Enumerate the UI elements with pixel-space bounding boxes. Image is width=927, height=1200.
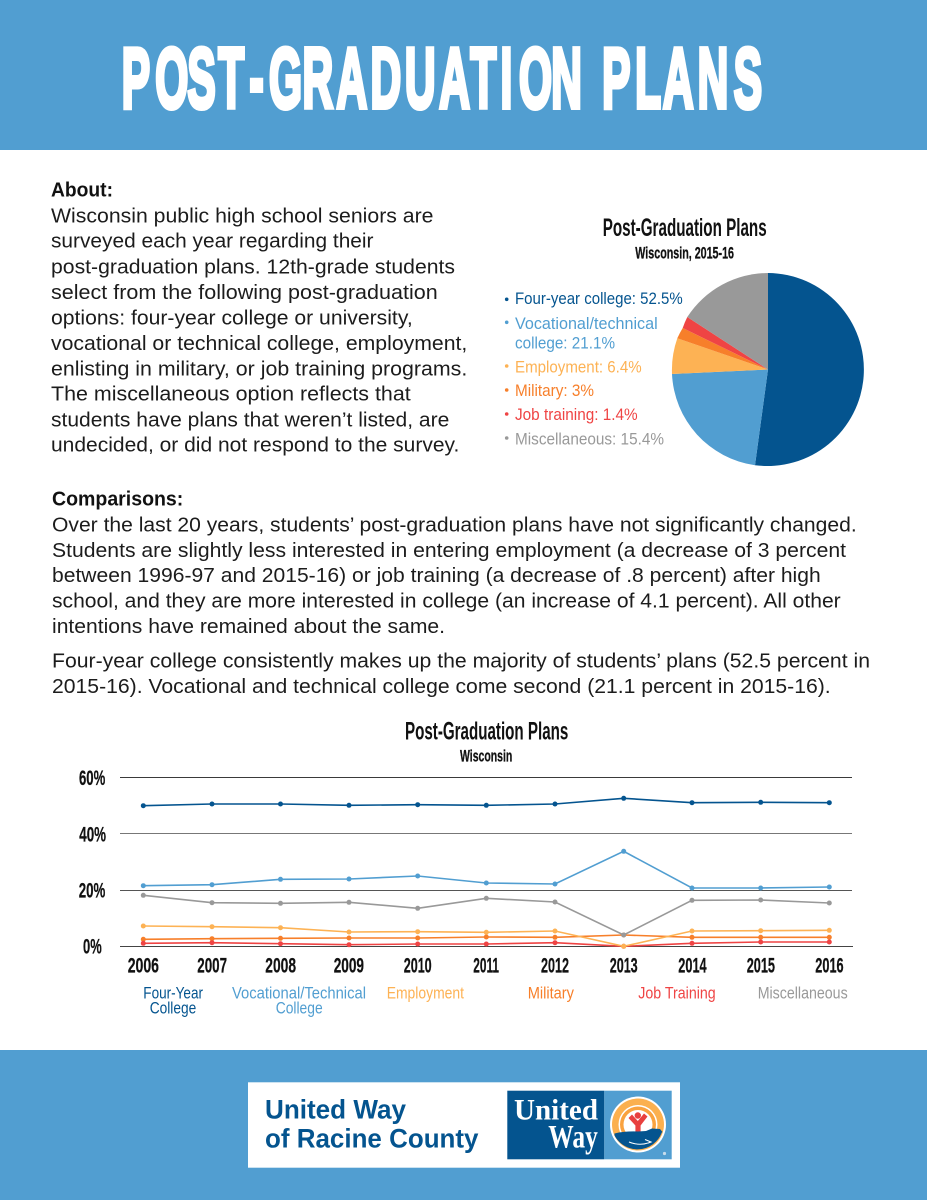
x axis labels: 2014 [678, 953, 707, 977]
line chart subtitle: Wisconsin [460, 747, 512, 766]
comparisons paragraph one: Students are slightly less interested in entering employment (a decrease of 3 percent [52, 540, 846, 562]
pie legend: college: 21.1% [515, 334, 615, 352]
x axis labels: 2007 [197, 953, 227, 977]
pie chart title: Post-Graduation Plans [603, 214, 767, 242]
about paragraph: undecided, or did not respond to the survey. [51, 435, 459, 457]
text block: comparisons [52, 488, 870, 698]
pie legend: Miscellaneous: 15.4% [515, 430, 664, 448]
about paragraph: surveyed each year regarding their [51, 231, 374, 253]
pie legend: Military: 3% [515, 382, 594, 400]
about paragraph: enlisting in military, or job training programs. [51, 358, 467, 380]
x axis labels: 2009 [334, 953, 364, 977]
pie legend: Vocational/technical [515, 315, 658, 333]
series: four-year college [141, 796, 832, 808]
line chart legend: Four-Year [143, 985, 203, 1003]
line chart legend: Job Training [638, 985, 716, 1003]
pie legend [505, 290, 683, 448]
series: vocational/technical college [141, 849, 832, 890]
icon: person [628, 1112, 648, 1134]
x axis labels: 2011 [473, 953, 499, 977]
y axis labels: 20% [79, 879, 105, 903]
United Way wordmark: Way [548, 1119, 598, 1155]
about paragraph: vocational or technical college, employment, [51, 333, 467, 355]
line chart legend: Miscellaneous [758, 985, 848, 1003]
x axis labels: 2010 [404, 953, 432, 977]
comparisons paragraph one [52, 515, 857, 638]
x axis labels: 2012 [541, 953, 569, 977]
about paragraph: post-graduation plans. 12th-grade students [51, 256, 455, 278]
about paragraph: students have plans that weren’t listed, are [51, 409, 449, 431]
United Way wordmark [507, 1091, 604, 1159]
line chart title: Post-Graduation Plans [405, 717, 568, 745]
about paragraph: options: four-year college or university, [51, 307, 413, 329]
comparisons paragraph one: between 1996-97 and 2015-16) or job training (a decrease of .8 percent) after high [52, 565, 821, 587]
series: job training [141, 940, 832, 949]
panel: line chart [79, 717, 853, 1018]
organization name [265, 1094, 478, 1153]
heading: comparisons: Comparisons: [52, 488, 183, 510]
y axis labels [79, 766, 106, 959]
panel: pie chart with legend [505, 214, 864, 466]
organization name: United Way [265, 1094, 406, 1124]
x axis labels: 2006 [128, 953, 159, 977]
icon: United Way helping hand [604, 1091, 672, 1159]
series: miscellaneous [141, 893, 832, 938]
comparisons paragraph one: Over the last 20 years, students’ post-graduation plans have not significantly changed. [52, 515, 857, 537]
comparisons paragraph one: intentions have remained about the same. [52, 616, 445, 638]
x axis labels: 2013 [610, 953, 638, 977]
comparisons paragraph two: 2015-16). Vocational and technical college come second (21.1 percent in 2015-16). [52, 676, 831, 698]
about paragraph: Wisconsin public high school seniors are [51, 205, 434, 227]
about paragraph [51, 205, 467, 457]
organization name: of Racine County [265, 1123, 478, 1153]
series: employment [141, 924, 832, 949]
line chart legend: College [276, 1000, 323, 1018]
line chart legend: Military [528, 985, 575, 1003]
comparisons paragraph two: Four-year college consistently makes up the majority of students’ plans (52.5 percent in [52, 651, 870, 673]
line chart legend: Employment [387, 985, 464, 1003]
y axis labels: 60% [79, 766, 105, 790]
pie legend: Four-year college: 52.5% [515, 290, 683, 308]
text block: about [51, 180, 467, 457]
y axis labels: 0% [83, 935, 102, 959]
x axis labels: 2008 [265, 953, 296, 977]
y axis labels: 40% [79, 822, 106, 846]
line chart legend: Vocational/Technical [232, 985, 366, 1003]
line chart legend [143, 985, 848, 1018]
pie legend: Job training: 1.4% [515, 406, 638, 424]
title: POST-GRADUATION PLANS [122, 32, 762, 126]
about paragraph: The miscellaneous option reflects that [51, 384, 411, 406]
series: military [141, 932, 832, 942]
about paragraph: select from the following post-graduation [51, 282, 438, 304]
pie legend: Employment: 6.4% [515, 358, 642, 376]
pie chart subtitle: Wisconsin, 2015-16 [635, 244, 734, 262]
x axis labels: 2016 [815, 953, 844, 977]
line chart legend: College [150, 1000, 196, 1018]
United Way wordmark: United [514, 1094, 598, 1127]
heading: about: About: [51, 180, 113, 202]
x axis labels [128, 953, 844, 977]
footer logo card [248, 1082, 680, 1168]
icon: hand [614, 1128, 662, 1149]
header banner [0, 0, 927, 150]
footer banner [0, 1050, 927, 1200]
comparisons paragraph one: school, and they are more interested in college (an increase of 4.1 percent). All other [52, 591, 841, 613]
x axis labels: 2015 [747, 953, 775, 977]
comparisons paragraph two [52, 651, 870, 698]
pie chart [672, 273, 864, 466]
